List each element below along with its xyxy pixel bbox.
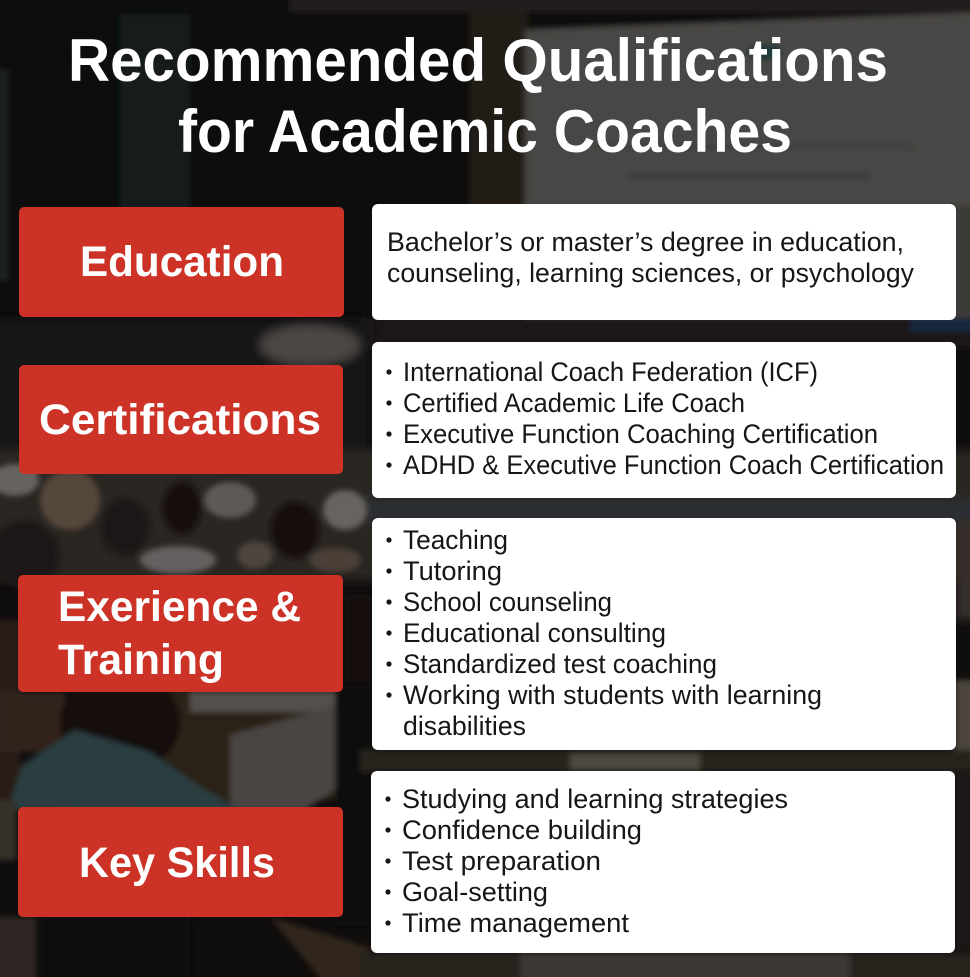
panel: experience list: School counseling (403, 587, 612, 617)
lower hall: desks and student (0, 620, 970, 977)
audience (0, 320, 970, 620)
panel: experience list (372, 518, 956, 750)
label: education (19, 207, 344, 317)
panel: education details: counseling, learning sciences, or psychology (387, 258, 914, 288)
panel: experience list: Teaching (403, 525, 508, 555)
panel: key skills list (371, 771, 955, 953)
row: certifications (19, 342, 956, 498)
panel: certifications list: International Coach Federation (ICF) (403, 357, 818, 387)
row: experience and training (18, 518, 956, 750)
panel: education details (372, 204, 956, 320)
panel: certifications list: Certified Academic Life Coach (403, 388, 745, 418)
title (68, 27, 888, 165)
label: certifications: Certifications (39, 396, 321, 444)
panel: certifications list: ADHD & Executive Function Coach Certification (403, 450, 944, 480)
label: experience and training: Exerience & (58, 583, 301, 631)
label: experience and training: Training (58, 636, 224, 684)
panel: experience list: Working with students with learning (403, 680, 822, 710)
panel: certifications list: Executive Function Coaching Certification (403, 419, 878, 449)
label: experience and training (18, 575, 343, 692)
panel: key skills list: Time management (402, 908, 629, 938)
panel: key skills list: Confidence building (402, 815, 642, 845)
panel: key skills list: Test preparation (402, 846, 601, 876)
panel: experience list: Tutoring (403, 556, 502, 586)
panel: certifications list (372, 342, 956, 498)
row: key skills (18, 771, 955, 953)
title: Recommended Qualifications (68, 27, 888, 94)
row: education (19, 204, 956, 320)
stage and projector screen (0, 0, 970, 348)
panel: experience list: disabilities (403, 711, 526, 741)
panel: key skills list: Goal-setting (402, 877, 548, 907)
panel: experience list: Standardized test coaching (403, 649, 717, 679)
panel: key skills list: Studying and learning strategies (402, 784, 788, 814)
panel: education details: Bachelor’s or master’s degree in education, (387, 227, 904, 257)
label: education: Education (80, 238, 284, 286)
title: for Academic Coaches (178, 98, 792, 165)
label: certifications (19, 365, 343, 474)
panel: experience list: Educational consulting (403, 618, 666, 648)
label: key skills (18, 807, 343, 917)
label: key skills: Key Skills (79, 839, 275, 887)
